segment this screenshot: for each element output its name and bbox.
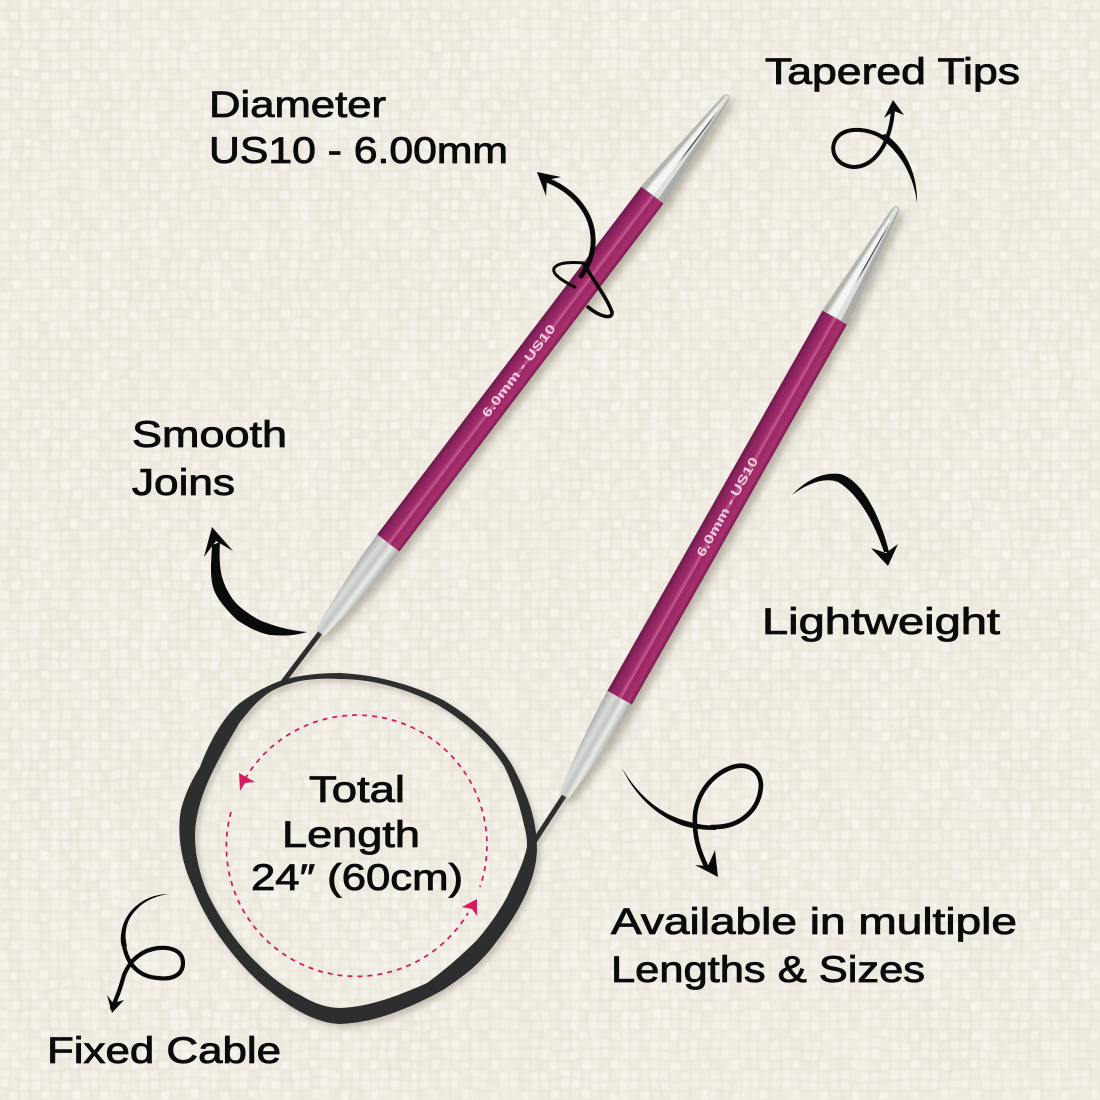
arrow: available lengths	[622, 766, 761, 877]
label: smooth joins: Smooth	[132, 414, 287, 455]
label: total length: Length	[282, 814, 420, 855]
arrowhead: bottom right	[462, 899, 477, 916]
label: lightweight: Lightweight	[762, 601, 1001, 642]
label: diameter: US10 - 6.00mm	[209, 130, 508, 171]
arrow: smooth joins	[204, 527, 307, 636]
label: total length: Total	[309, 769, 405, 810]
label: available lengths and sizes: Lengths & Sizes	[611, 949, 925, 990]
purple shaft	[607, 310, 847, 705]
arrow: fixed cable	[107, 894, 183, 1013]
metal tapered tip	[823, 200, 910, 324]
connector: smooth join	[309, 535, 399, 641]
metal tapered tip	[641, 87, 739, 203]
label: available lengths and sizes: Available in multiple	[611, 901, 1017, 942]
needle: left tip	[309, 87, 739, 641]
total length dashed circle	[226, 715, 487, 976]
needle: right tip	[552, 200, 910, 803]
label: smooth joins: Joins	[132, 462, 235, 503]
connector: smooth join	[552, 691, 632, 803]
arrow: tapered tips	[833, 100, 917, 203]
label: fixed cable: Fixed Cable	[47, 1030, 281, 1071]
circular cable loop	[179, 633, 564, 1024]
purple shaft	[377, 186, 664, 551]
arrowhead: top left	[239, 773, 255, 791]
label: tapered tips: Tapered Tips	[765, 51, 1020, 92]
label: diameter: Diameter	[209, 84, 386, 125]
arrow: diameter rotation	[537, 172, 612, 317]
size label: 6.0mm - US10	[694, 455, 761, 559]
size label: 6.0mm - US10	[479, 322, 559, 420]
arrow: lightweight	[792, 474, 898, 566]
label: total length: 24″ (60cm)	[251, 857, 463, 898]
